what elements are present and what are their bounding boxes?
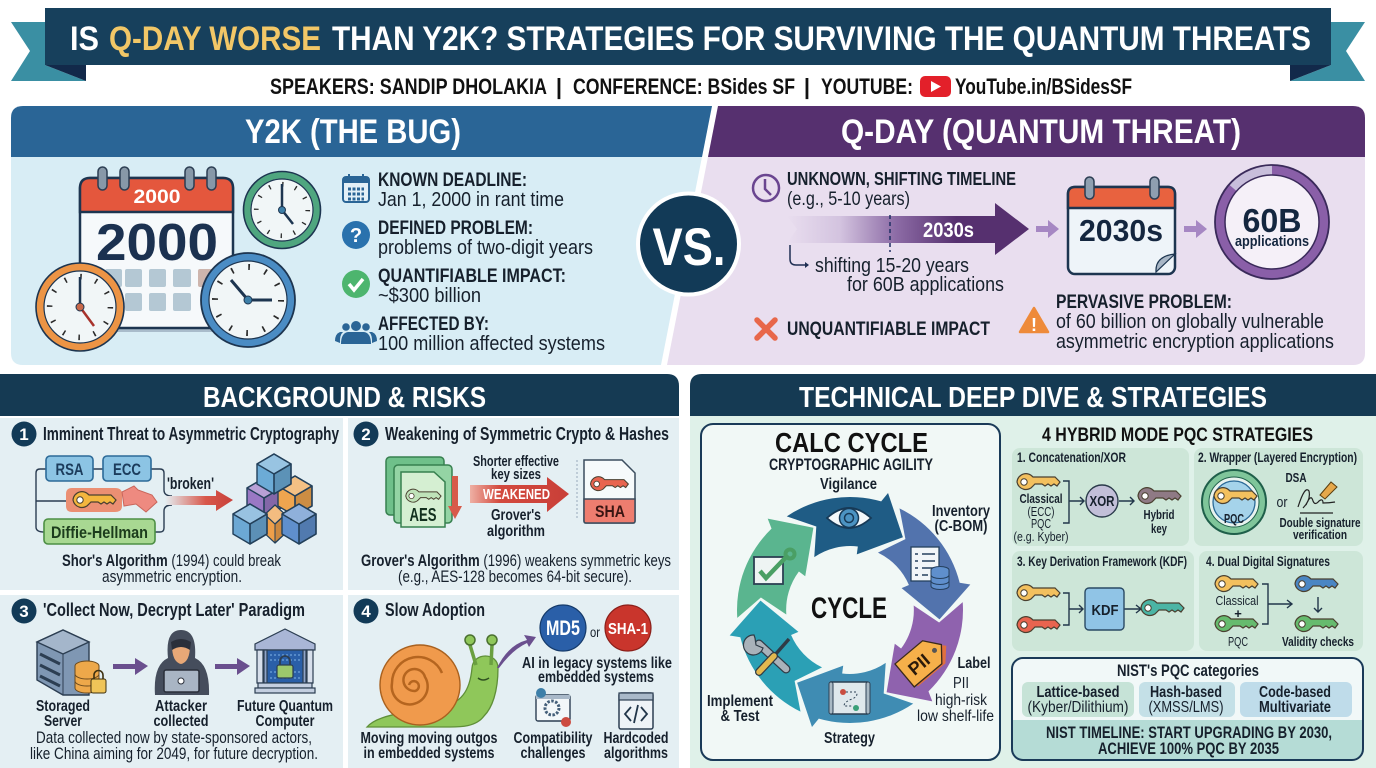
title banner	[11, 8, 1365, 81]
text: or: or	[590, 624, 600, 640]
panel: Q-Day	[667, 106, 1365, 365]
text: affected by: AFFECTED BY:	[378, 313, 489, 335]
card: wrapper: PQC	[1224, 512, 1244, 526]
card 3: collect now: 3	[19, 602, 29, 621]
chip: lattice	[1022, 682, 1134, 717]
text: known deadline: Jan 1, 2000 in rant time	[378, 189, 564, 211]
icon: quantum bank	[255, 629, 315, 693]
card 2: symmetric: Weakening of Symmetric Crypto & Hashes	[385, 424, 669, 444]
card: wrapper: or	[1276, 494, 1288, 511]
heading: technical: TECHNICAL DEEP DIVE & STRATEGIES	[799, 382, 1267, 414]
labels: slow adoption: Compatibility	[514, 730, 593, 747]
card: dual signatures: PQC	[1228, 634, 1248, 649]
arrow: to calendar	[1036, 220, 1059, 238]
icon: compatibility	[536, 688, 571, 727]
chip: lattice: (Kyber/Dilithium)	[1028, 699, 1128, 716]
heading: Y2K: Y2K (THE BUG)	[245, 113, 461, 151]
panel: CALC cycle: CALC CYCLE	[775, 427, 928, 458]
labels: cycle stages: Implement	[707, 693, 773, 710]
icon: SHA-1: SHA-1	[608, 621, 648, 638]
caption: collect: Data collected now by state-sponsored actors,	[36, 729, 312, 747]
card: dual signatures: +	[1234, 606, 1242, 621]
icon: tools	[743, 635, 789, 672]
card 4: slow adoption	[348, 595, 679, 768]
icon: orange clock	[36, 263, 124, 351]
speakers line: |	[804, 74, 810, 99]
card: concatenation: Classical	[1020, 491, 1062, 506]
panel: background and risks	[0, 374, 679, 768]
text: shorter key sizes: key sizes	[491, 467, 541, 483]
icon: eye	[827, 508, 871, 528]
card: concatenation: Hybrid	[1144, 507, 1175, 522]
caption: shor	[62, 552, 282, 586]
text: pervasive problem: PERVASIVE PROBLEM:	[1056, 292, 1232, 313]
icon: SHA doc	[584, 460, 635, 523]
card 1: asymmetric	[0, 418, 343, 590]
text: quantifiable impact: ~$300 billion	[378, 285, 481, 307]
icon: calendar 2000: 2000	[134, 186, 181, 208]
text: unquantifiable impact: UNQUANTIFIABLE IMPACT	[787, 319, 990, 340]
text: defined problem: DEFINED PROBLEM:	[378, 217, 533, 239]
arrow: weakened	[470, 477, 569, 512]
labels: cycle stages: Vigilance	[820, 476, 877, 493]
text: quantifiable impact	[378, 265, 566, 307]
card: concatenation: (ECC)	[1028, 504, 1054, 519]
labels: collect diagram	[36, 698, 333, 730]
text: shifting years: for 60B applications	[847, 274, 1004, 296]
text: defined problem	[378, 217, 593, 259]
arrow: down red	[448, 476, 462, 519]
caption: collect	[30, 729, 318, 763]
icon: server	[37, 630, 106, 695]
caption: shor: Shor's Algorithm (1994) could break	[62, 552, 282, 570]
heading: Q-Day: Q-DAY (QUANTUM THREAT)	[841, 113, 1241, 151]
icon: MD5: MD5	[546, 617, 580, 640]
card: concatenation: 1. Concatenation/XOR	[1017, 449, 1126, 465]
icon: cubes	[233, 454, 316, 544]
heading: hybrid: 4 HYBRID MODE PQC STRATEGIES	[1042, 424, 1313, 446]
text: unknown timeline: (e.g., 5-10 years)	[787, 189, 910, 210]
card: concatenation: PQC	[1031, 516, 1051, 531]
card: concatenation: key	[1151, 521, 1168, 536]
caption: shor: asymmetric encryption.	[102, 568, 242, 586]
chip: code	[1240, 682, 1352, 717]
arrow: snail to hashes	[497, 635, 536, 668]
labels: cycle stages: (C-BOM)	[934, 518, 988, 535]
text: pervasive problem	[1056, 292, 1334, 353]
title banner: IS	[70, 20, 99, 58]
panel: NIST	[1012, 658, 1363, 760]
labels: slow adoption: Hardcoded	[604, 730, 668, 747]
card: dual signatures	[1199, 551, 1363, 651]
text: shifting years	[790, 245, 1004, 296]
icon: checklist database	[911, 547, 949, 590]
heading: background: BACKGROUND & RISKS	[203, 382, 486, 414]
icon: PII tag	[895, 631, 955, 688]
card: KDF: KDF	[1092, 602, 1118, 619]
text: unknown timeline	[787, 168, 1016, 210]
card: concatenation	[1012, 448, 1189, 546]
card: dual signatures: 4. Dual Digital Signatures	[1206, 553, 1330, 569]
arrow: to 60B	[1184, 220, 1207, 238]
icon: 60B ring	[1215, 165, 1329, 279]
text: shorter key sizes: Shorter effective	[473, 454, 559, 470]
labels: collect diagram: Storaged	[36, 698, 90, 715]
card 2: symmetric	[348, 418, 679, 590]
labels: collect diagram: Attacker	[155, 698, 207, 715]
diagram: shor	[36, 456, 233, 544]
title banner: Q-DAY WORSE	[109, 20, 321, 58]
icon: warning: !	[1031, 315, 1037, 335]
card 1: asymmetric: Imminent Threat to Asymmetric Cryptography	[43, 424, 339, 444]
text: shorter key sizes	[473, 454, 559, 483]
heading: technical	[690, 374, 1376, 416]
card: dual signatures: Validity checks	[1282, 634, 1354, 649]
card: dual signatures: Classical	[1216, 593, 1259, 608]
text: affected by	[378, 313, 605, 355]
labels: collect diagram: Server	[44, 713, 82, 730]
labels: slow adoption	[360, 730, 668, 762]
icon: check and wrench	[754, 550, 794, 584]
text: grover: Grover's	[491, 507, 541, 524]
icon: hardcoded	[619, 693, 653, 729]
labels: slow adoption: challenges	[520, 745, 586, 762]
arrow: 2030s timeline	[787, 203, 1029, 255]
speakers line: YouTube.in/BSidesSF	[955, 74, 1132, 99]
labels: cycle stages: PII	[953, 675, 969, 692]
card: concatenation: (e.g. Kyber)	[1014, 529, 1068, 544]
icon: PII tag: PII	[904, 650, 934, 679]
icon: calendar 2030s: 2030s	[1079, 213, 1163, 248]
icon: question: ?	[350, 225, 362, 247]
text: legacy systems: AI in legacy systems like	[522, 655, 672, 672]
labels: slow adoption: algorithms	[604, 745, 668, 762]
text: grover: algorithm	[487, 523, 545, 540]
arrow: server to attacker	[113, 658, 148, 675]
caption: grover: (e.g., AES-128 becomes 64-bit secure).	[398, 568, 632, 586]
text: affected by: 100 million affected systems	[378, 333, 605, 355]
text: pervasive problem: asymmetric encryption applications	[1056, 331, 1334, 353]
arrow: 2030s timeline: 2030s	[923, 219, 974, 242]
icon: AES docs	[386, 457, 452, 527]
labels: collect diagram: Future Quantum	[237, 698, 333, 715]
icon: calendar 2030s	[1068, 177, 1175, 274]
chip: hash: Hash-based	[1150, 684, 1222, 701]
diagram: shor: 'broken'	[167, 475, 214, 493]
labels: collect diagram: Computer	[256, 713, 314, 730]
speakers line: SPEAKERS: SANDIP DHOLAKIA	[270, 74, 547, 99]
arrow: attacker to quantum	[215, 658, 250, 675]
text: known deadline	[378, 169, 564, 211]
icon: green clock	[244, 172, 320, 248]
icon: AES docs: AES	[410, 505, 436, 525]
icon: 60B ring: 60B	[1242, 202, 1302, 239]
text: shifting years: shifting 15-20 years	[815, 255, 969, 277]
icon: snail	[367, 635, 498, 727]
labels: slow adoption: Moving moving outgos	[360, 730, 498, 747]
labels: slow adoption: in embedded systems	[364, 745, 494, 762]
text: defined problem: problems of two-digit years	[378, 237, 593, 259]
chip: hash: (XMSS/LMS)	[1148, 699, 1224, 716]
panel: CALC cycle	[701, 424, 1000, 767]
panel: CALC cycle: CRYPTOGRAPHIC AGILITY	[769, 456, 933, 474]
heading: background	[0, 374, 679, 416]
icon: calendar 2000	[80, 167, 233, 332]
speakers line	[270, 74, 1132, 99]
card: wrapper: DSA	[1286, 470, 1307, 485]
labels: cycle stages: Label	[958, 655, 990, 672]
card: KDF: 3. Key Derivation Framework (KDF)	[1017, 553, 1187, 569]
speakers line: CONFERENCE: BSides SF	[573, 74, 795, 99]
icon: check	[342, 270, 370, 298]
text: cycle center: CYCLE	[811, 592, 887, 625]
icon: people	[335, 321, 377, 344]
caption: collect: like China aiming for 2049, for future decryption.	[30, 745, 318, 763]
icon: red X	[757, 320, 775, 338]
card 2: symmetric: 2	[361, 425, 371, 444]
text: pervasive problem: of 60 billion on globally vulnerable	[1056, 311, 1324, 333]
card 4: slow adoption: Slow Adoption	[385, 600, 485, 620]
text: NIST timeline: ACHIEVE 100% PQC BY 2035	[1098, 740, 1279, 758]
caption: grover	[361, 552, 671, 586]
card: wrapper: verification	[1293, 527, 1347, 542]
icon: question	[342, 221, 370, 249]
card 4: slow adoption: 4	[361, 602, 371, 621]
text: grover	[487, 507, 545, 540]
text: known deadline: KNOWN DEADLINE:	[378, 169, 527, 191]
icon: MD5	[540, 605, 586, 651]
labels: cycle stages: low shelf-life	[917, 708, 994, 725]
labels: collect diagram: collected	[154, 713, 208, 730]
panel: NIST: NIST's PQC categories	[1117, 662, 1259, 680]
labels: cycle stages	[707, 476, 994, 747]
diagram: shor: RSA	[56, 460, 84, 479]
icon: warning	[1020, 308, 1048, 335]
diagram: shor: ECC	[113, 460, 141, 479]
icon: blue clock	[201, 253, 295, 347]
chip: lattice: Lattice-based	[1036, 684, 1120, 701]
card 3: collect now	[0, 595, 343, 768]
icon: youtube	[920, 76, 951, 97]
text: NIST timeline	[1046, 724, 1332, 758]
panel: technical deep dive	[690, 374, 1376, 768]
chip: code: Code-based	[1259, 684, 1331, 701]
text: legacy systems	[522, 655, 672, 686]
speakers line: |	[556, 74, 562, 99]
chart: cycle arrows	[705, 453, 995, 767]
VS badge	[638, 194, 739, 294]
icon: SHA doc: SHA	[595, 502, 625, 521]
icon: clock outline	[753, 175, 779, 201]
card: KDF	[1012, 551, 1194, 651]
icon: mini calendar	[343, 174, 369, 202]
arrow: weakened: WEAKENED	[483, 487, 550, 503]
icon: calendar 2000: 2000	[96, 214, 218, 272]
labels: cycle stages: high-risk	[935, 692, 987, 709]
card: wrapper	[1194, 448, 1363, 546]
caption: grover: Grover's Algorithm (1996) weakens symmetric keys	[361, 552, 671, 570]
speakers line: YOUTUBE:	[821, 74, 913, 99]
labels: cycle stages: & Test	[720, 708, 760, 725]
icon: SHA-1	[605, 605, 651, 651]
card: concatenation: XOR	[1090, 493, 1115, 510]
panel: Y2K	[11, 106, 712, 365]
text: unknown timeline: UNKNOWN, SHIFTING TIMELINE	[787, 168, 1016, 189]
text: quantifiable impact: QUANTIFIABLE IMPACT:	[378, 265, 566, 287]
labels: cycle stages: Inventory	[932, 503, 990, 520]
icon: 60B ring: applications	[1235, 234, 1309, 250]
chip: code: Multivariate	[1259, 699, 1331, 716]
text: legacy systems: embedded systems	[538, 669, 654, 686]
VS badge: VS.	[652, 218, 726, 277]
chip: hash	[1139, 682, 1235, 717]
card 3: collect now: 'Collect Now, Decrypt Later' Paradigm	[43, 600, 305, 620]
icon: map	[829, 682, 870, 714]
icon: attacker	[155, 630, 209, 695]
card 1: asymmetric: 1	[19, 425, 29, 444]
labels: cycle stages: Strategy	[824, 730, 875, 747]
diagram: shor: Diffie-Hellman	[51, 523, 148, 542]
